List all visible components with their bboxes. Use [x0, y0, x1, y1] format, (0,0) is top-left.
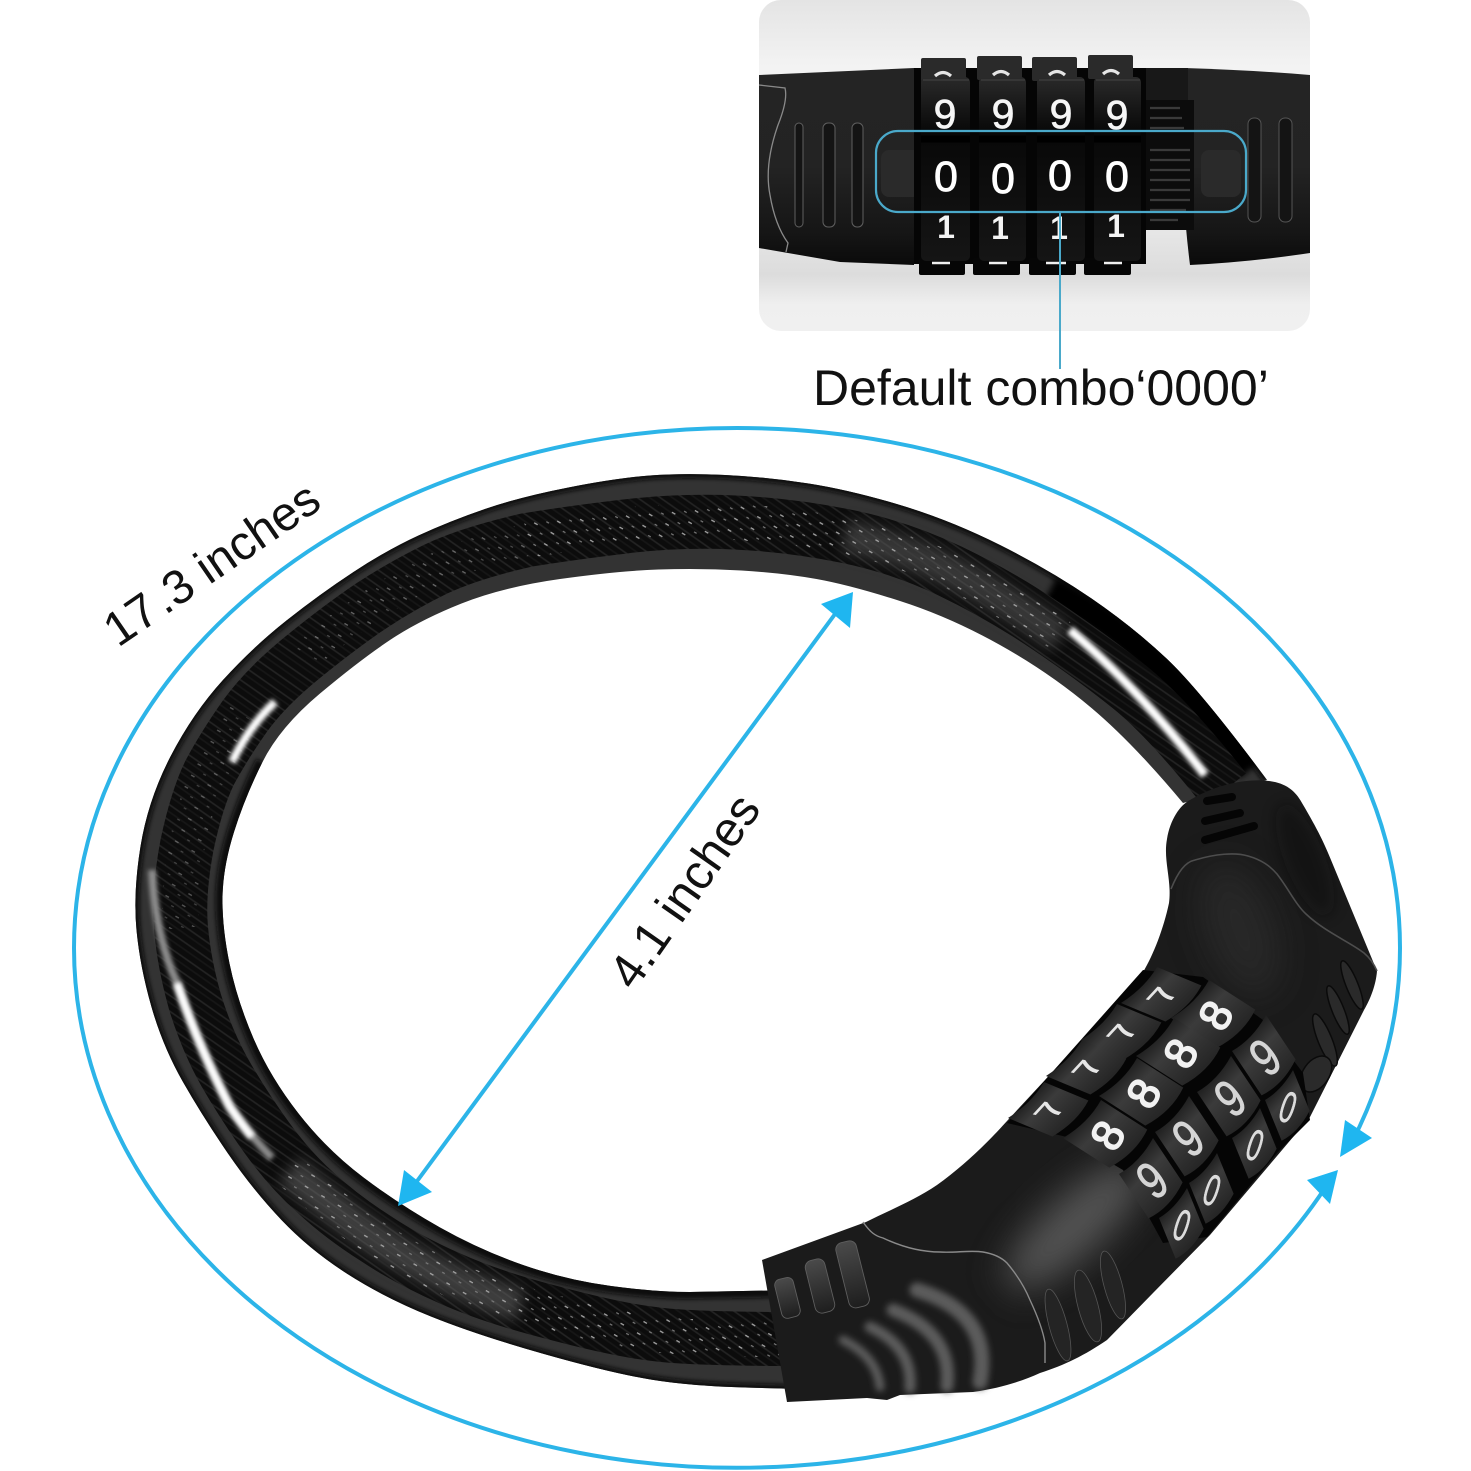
dial recess	[1007, 970, 1310, 1243]
rotated dial digits: 8	[1154, 1031, 1209, 1077]
inner dark rim	[222, 762, 800, 1292]
dial dividers	[923, 79, 1140, 81]
lock band right segment	[1182, 68, 1310, 265]
spindle and gear	[881, 68, 1241, 264]
lock body	[762, 780, 1377, 1402]
rotated dial digits: 0	[1167, 1199, 1197, 1251]
combination dials	[919, 55, 1141, 275]
highlight frame around 0000	[876, 131, 1246, 212]
right band grooves	[1248, 118, 1292, 222]
diameter arrow	[398, 592, 853, 1206]
rotated dial digits: 7	[1099, 1022, 1148, 1043]
rotated dial digits: 9	[1162, 1108, 1215, 1168]
digits row 0	[934, 152, 1129, 203]
left band edge line	[759, 85, 788, 252]
rotated dial caps	[1008, 967, 1311, 1262]
dark outer rim	[135, 474, 1267, 1389]
digits row 9: 9	[934, 91, 956, 137]
digits row 0: 0	[1105, 153, 1129, 201]
digits row 1: 1	[991, 210, 1009, 246]
lower grip ribs	[1040, 1249, 1131, 1363]
digits row 1	[937, 208, 1125, 246]
digits row 0: 0	[934, 153, 958, 201]
arrowhead: top end	[1340, 1120, 1372, 1157]
rotated dial digits: 8	[1081, 1113, 1136, 1159]
digits row 9: 9	[992, 91, 1014, 137]
rotated dial digits: 0	[1197, 1164, 1227, 1216]
arrowhead: lower	[398, 1170, 432, 1206]
top vents	[1205, 797, 1254, 840]
arrowhead: upper	[821, 592, 853, 628]
upper right dark sheath	[1050, 590, 1250, 770]
rotated dial digits: 7	[1026, 1100, 1075, 1121]
braided core	[180, 522, 1225, 1339]
upper seam line	[1171, 854, 1377, 971]
circumference arc with arrows	[74, 428, 1400, 1468]
digits row 9	[934, 91, 1128, 138]
digits row 1: 1	[937, 209, 955, 245]
sparkling braid sections	[845, 536, 1060, 637]
rotated dial digits: 7	[1139, 985, 1188, 1006]
digits row 1: 1	[1050, 210, 1068, 246]
rotated dial digits: 9	[1126, 1150, 1179, 1210]
soft body shading	[988, 797, 1346, 1308]
rotated dial digits: 7	[1064, 1058, 1113, 1079]
digits row 0: 0	[991, 155, 1015, 203]
sculpted bumps	[843, 1290, 982, 1388]
upper grip ribs	[1294, 959, 1367, 1098]
white tick marks	[932, 262, 1122, 264]
leader line	[1059, 212, 1061, 369]
rotated dial digits: 9	[1204, 1068, 1257, 1128]
dark gaps between digits	[921, 136, 1141, 142]
rotated dial digits: 9	[1239, 1027, 1292, 1087]
rotated dial digits: 8	[1189, 993, 1244, 1039]
photo panel: dial close-up	[759, 0, 1310, 331]
lock band left segment	[759, 68, 914, 265]
digits row 9: 9	[1050, 91, 1072, 137]
cable loop	[135, 474, 1267, 1389]
label: circumference: 17.3 inches	[94, 472, 330, 657]
left band grooves	[795, 123, 863, 227]
digits row 1: 1	[1107, 208, 1125, 244]
arrowhead: bottom end	[1307, 1170, 1338, 1204]
label: default combo: Default combo‘0000’	[813, 360, 1269, 416]
lower end vents	[773, 1239, 871, 1320]
digits row 9: 9	[1106, 92, 1128, 138]
label: inner diameter: 4.1 inches	[599, 784, 771, 998]
rotated dial digits: 0	[1273, 1081, 1303, 1133]
lower seam line	[863, 1222, 1045, 1363]
digits row 0: 0	[1048, 152, 1072, 200]
rotated dial digits: 8	[1117, 1071, 1172, 1117]
rotated dial digits: 0	[1240, 1119, 1270, 1171]
rotated dial digits	[1026, 985, 1303, 1251]
glossy highlights	[1070, 630, 1205, 775]
